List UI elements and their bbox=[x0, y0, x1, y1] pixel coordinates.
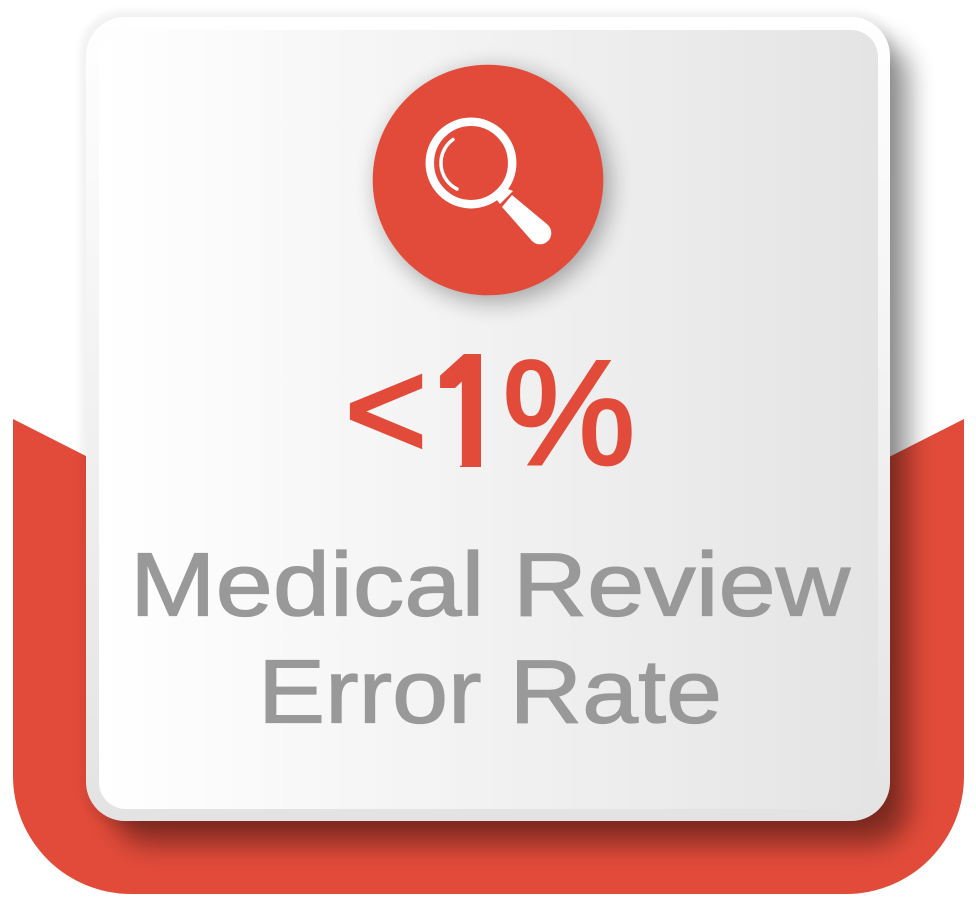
stat value: 1 bbox=[430, 317, 508, 523]
stat label: Medical Review bbox=[130, 536, 851, 636]
icon: magnifying glass in red circle bbox=[373, 65, 610, 302]
white card bbox=[86, 17, 890, 821]
card shadow bbox=[80, 11, 909, 844]
stat value bbox=[350, 354, 632, 467]
stat label bbox=[130, 536, 851, 742]
stat value: % bbox=[502, 329, 636, 496]
stat label: Error Rate bbox=[258, 642, 722, 742]
stat value: < bbox=[345, 334, 427, 486]
red ribbon backing bbox=[13, 419, 964, 894]
